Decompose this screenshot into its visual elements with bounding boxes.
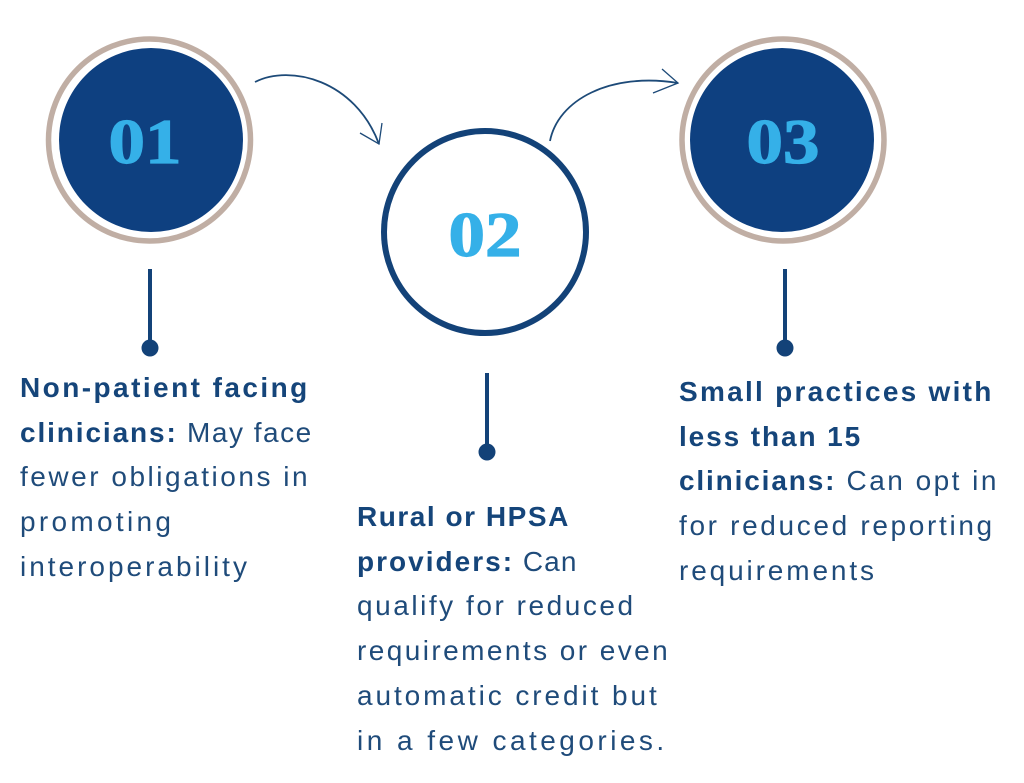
arrow 01 to 02 [255,75,382,144]
text: small practices: for reduced reporting [679,510,995,541]
number 03: 03 [747,106,819,177]
text: non-patient facing clinicians: fewer obligations in [20,461,310,492]
text: non-patient facing clinicians: promoting [20,506,174,537]
number 02: 02 [449,199,521,270]
arrow 02 to 03 [550,69,678,141]
text: rural or HPSA providers: requirements or even [357,635,670,666]
text: rural or HPSA providers: Rural or HPSA [357,501,570,532]
circle 03 [682,39,884,241]
number 01: 01 [109,106,181,177]
text: rural or HPSA providers: automatic credit but [357,680,660,711]
connector 01 [142,269,158,356]
circle 01 [48,39,250,241]
circle 02 [384,131,586,333]
text: small practices: less than 15 [679,421,862,452]
text: non-patient facing clinicians: interoperability [20,551,250,582]
text: rural or HPSA providers: providers: Can [357,546,577,577]
text: small practices: requirements [679,555,877,586]
text: small practices: clinicians: Can opt in [679,465,999,496]
text: rural or HPSA providers: qualify for reduced [357,590,636,621]
text: rural or HPSA providers: in a few categories. [357,725,668,756]
text: small practices [679,376,999,586]
connector 03 [776,269,794,356]
text: non-patient facing clinicians: clinicians: May face [20,417,313,448]
connector 02 [478,373,496,460]
text: small practices: Small practices with [679,376,994,407]
text: non-patient facing clinicians [20,372,313,582]
text: non-patient facing clinicians: Non-patient facing [20,372,310,403]
text: rural or HPSA providers [357,501,670,756]
